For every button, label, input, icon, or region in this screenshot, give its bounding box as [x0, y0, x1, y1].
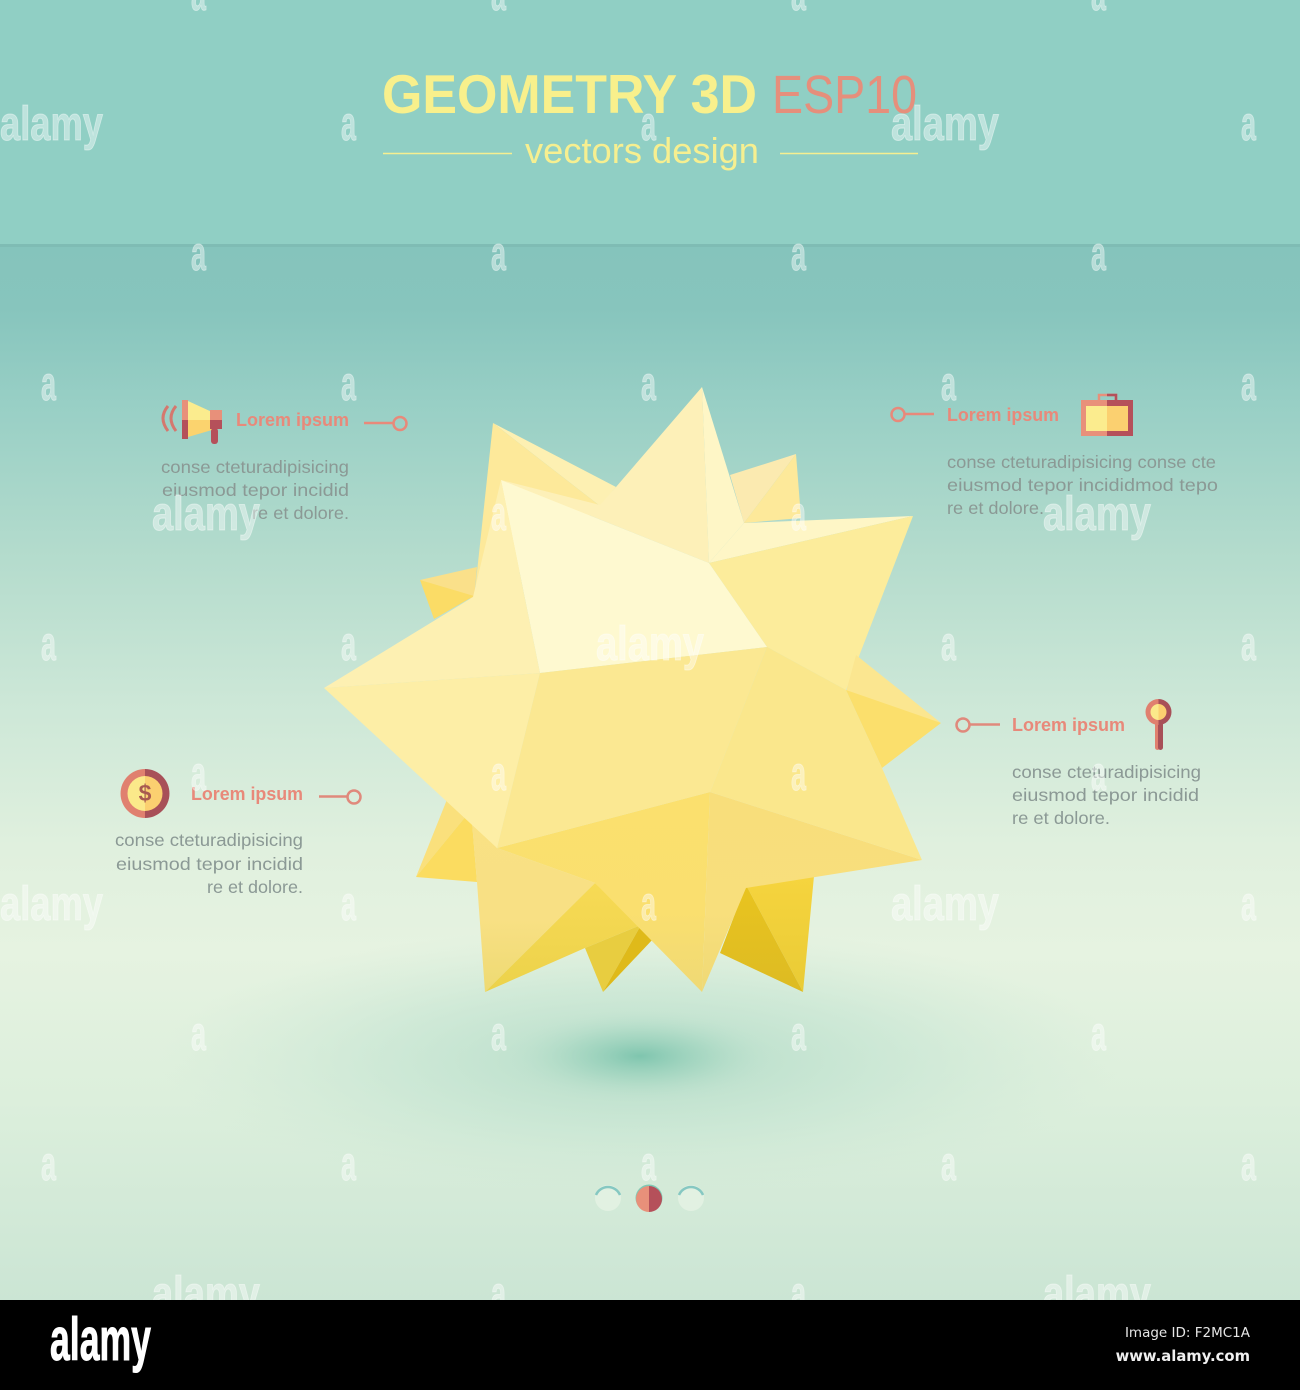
- stock watermark pattern: a: [641, 878, 656, 931]
- stock watermark pattern: a: [41, 1138, 56, 1191]
- stock watermark pattern: a: [641, 98, 656, 151]
- stock watermark pattern: a: [341, 1138, 356, 1191]
- stock watermark pattern: a: [491, 1268, 506, 1321]
- stock watermark pattern: a: [791, 488, 806, 541]
- stock watermark pattern: a: [1241, 98, 1256, 151]
- stock watermark pattern: a: [341, 358, 356, 411]
- website: www.alamy.com: [1116, 1348, 1250, 1365]
- stock watermark pattern: a: [191, 1008, 206, 1061]
- stock watermark pattern: alamy: [1043, 488, 1151, 541]
- connector: [319, 790, 360, 804]
- stock watermark pattern: a: [791, 228, 806, 281]
- stock watermark pattern: a: [641, 358, 656, 411]
- connector: [956, 718, 1000, 732]
- stock watermark pattern: a: [491, 1008, 506, 1061]
- polyhedron star: [324, 387, 941, 992]
- icon: magnifier: [1146, 699, 1172, 750]
- stock watermark pattern: a: [491, 488, 506, 541]
- title: ESP10: [772, 65, 917, 125]
- connector: [892, 408, 934, 421]
- stock watermark pattern: a: [1091, 1008, 1106, 1061]
- stock watermark pattern: alamy: [891, 878, 999, 931]
- heading: Lorem ipsum: [1012, 715, 1125, 735]
- pagination dots: [595, 1184, 704, 1212]
- footer logo: alamy: [50, 1306, 151, 1373]
- stock watermark pattern: a: [1091, 748, 1106, 801]
- heading: Lorem ipsum: [947, 405, 1059, 425]
- stock watermark pattern: a: [941, 1138, 956, 1191]
- body text: [947, 452, 1218, 518]
- body text: conse cteturadipisicing conse cte: [947, 452, 1216, 472]
- body text: re et dolore.: [252, 503, 349, 523]
- stock watermark pattern: a: [341, 618, 356, 671]
- body text: [115, 830, 303, 897]
- callout: search: [956, 699, 1201, 828]
- stock watermark pattern: a: [641, 1138, 656, 1191]
- body text: re et dolore.: [207, 877, 303, 897]
- body text: conse cteturadipisicing: [115, 830, 303, 850]
- icon: megaphone: [163, 400, 222, 444]
- body text: eiusmod tepor incidid: [1012, 785, 1199, 805]
- body text: [161, 457, 349, 523]
- stock watermark pattern: alamy: [891, 98, 999, 151]
- heading: Lorem ipsum: [191, 784, 303, 804]
- stock watermark pattern: a: [491, 748, 506, 801]
- stock watermark pattern: alamy: [0, 98, 103, 151]
- stock watermark pattern: a: [41, 618, 56, 671]
- stock watermark pattern: a: [791, 748, 806, 801]
- body text: re et dolore.: [947, 498, 1044, 518]
- body text: eiusmod tepor incidid: [162, 480, 349, 500]
- stock watermark pattern: alamy: [0, 878, 103, 931]
- callout: announcements: [161, 400, 406, 523]
- body text: [1012, 762, 1201, 828]
- stock watermark pattern: a: [1241, 358, 1256, 411]
- stock watermark pattern: a: [1241, 1138, 1256, 1191]
- callout: finance: [115, 769, 360, 897]
- stock watermark pattern: a: [1091, 228, 1106, 281]
- stock watermark pattern: alamy: [152, 1268, 260, 1321]
- heading: Lorem ipsum: [236, 410, 349, 430]
- image id: Image ID: F2MC1A: [1125, 1325, 1251, 1341]
- stock watermark pattern: a: [191, 748, 206, 801]
- stock watermark pattern: a: [1241, 618, 1256, 671]
- body text: re et dolore.: [1012, 808, 1110, 828]
- stock watermark pattern: a: [41, 358, 56, 411]
- body text: eiusmod tepor incididmod tepo: [947, 475, 1218, 495]
- title: GEOMETRY 3D: [382, 63, 757, 125]
- connector: [364, 417, 406, 430]
- footer bar: [0, 1300, 1300, 1390]
- body text: eiusmod tepor incidid: [116, 854, 303, 874]
- stock watermark pattern: alamy: [596, 618, 704, 671]
- stock watermark pattern: alamy: [152, 488, 260, 541]
- stock watermark pattern: a: [341, 878, 356, 931]
- stock watermark pattern: a: [791, 1268, 806, 1321]
- header band: [0, 0, 1300, 247]
- icon: dollar coin: $: [139, 780, 152, 806]
- floor shadow: [160, 925, 1120, 1195]
- stock watermark pattern: a: [491, 228, 506, 281]
- body text: conse cteturadipisicing: [1012, 762, 1201, 782]
- stock watermark pattern: a: [941, 358, 956, 411]
- callout: business: [892, 395, 1218, 518]
- icon: briefcase: [1081, 395, 1133, 436]
- body text: conse cteturadipisicing: [161, 457, 349, 477]
- stock watermark pattern: alamy: [1043, 1268, 1151, 1321]
- icon: dollar coin: [121, 769, 169, 818]
- stock watermark pattern: a: [941, 618, 956, 671]
- stock watermark pattern: a: [191, 228, 206, 281]
- stock watermark pattern: a: [791, 1008, 806, 1061]
- stock watermark pattern: a: [1241, 878, 1256, 931]
- stock watermark pattern: a: [341, 98, 356, 151]
- subtitle: vectors design: [525, 130, 759, 171]
